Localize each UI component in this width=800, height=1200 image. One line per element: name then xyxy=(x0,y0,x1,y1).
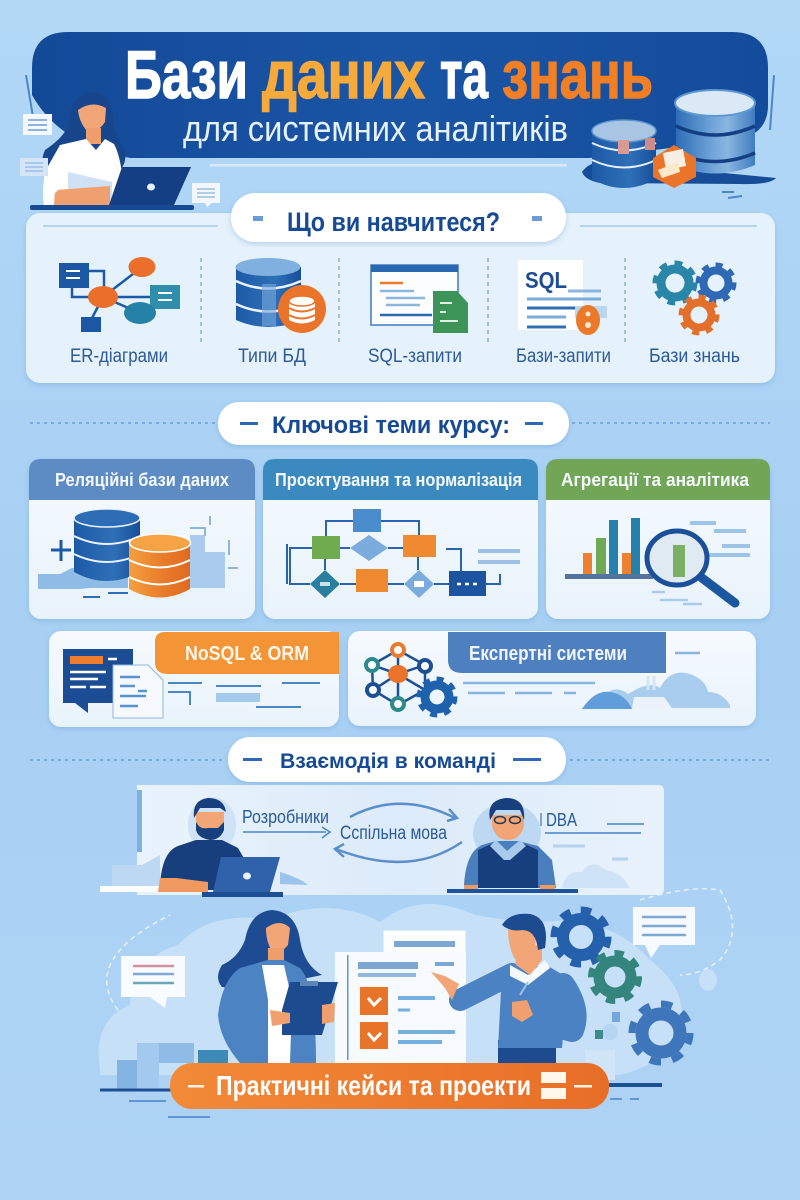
icon: SQL window xyxy=(371,265,468,333)
label: Бази знань xyxy=(649,346,740,367)
icon: SQL document: SQL xyxy=(525,267,567,293)
arrow xyxy=(243,827,330,838)
panel: team collaboration xyxy=(100,785,664,897)
decorative blocks xyxy=(100,1043,662,1117)
card: expert systems: Експертні системи xyxy=(469,643,627,665)
icon: ER diagram xyxy=(59,257,180,332)
illustration: woman with laptop xyxy=(20,92,220,210)
title xyxy=(125,37,653,113)
arrows: exchange cycle xyxy=(335,804,462,862)
header banner xyxy=(26,32,774,166)
pill heading: key topics xyxy=(218,402,569,445)
chat bubbles xyxy=(20,114,220,207)
illustration: documents with checklist xyxy=(335,930,466,1066)
title: знань xyxy=(502,37,653,113)
icon: stacked bars xyxy=(541,1072,566,1099)
subtitle: для системних аналітиків xyxy=(183,108,568,149)
card: aggregations and analytics: Агрегації та аналітика xyxy=(561,470,750,490)
icon: SQL document xyxy=(518,260,607,335)
pill heading: Що ви навчитеся? xyxy=(287,207,500,237)
flowchart xyxy=(287,509,520,598)
title: Бази xyxy=(125,37,248,113)
illustration: woman with clipboard xyxy=(218,910,338,1063)
icon: knowledge network and gear xyxy=(366,644,455,715)
label: Типи БД xyxy=(238,346,306,367)
card: design and normalization: Проєктування та нормалізація xyxy=(275,470,522,490)
illustration: DBA xyxy=(447,798,578,893)
card: design and normalization xyxy=(263,459,538,619)
backdrop: project scene cloud xyxy=(99,904,682,1075)
icon: DB types xyxy=(236,258,326,333)
icon: documents xyxy=(63,649,320,718)
chat bubble: left xyxy=(121,956,185,1008)
card: expert systems xyxy=(348,631,756,726)
card: relational databases xyxy=(29,459,255,619)
pill heading: team interaction: Взаємодія в команді xyxy=(280,750,496,773)
pill heading: team interaction xyxy=(228,737,566,782)
card: NoSQL and ORM: NoSQL & ORM xyxy=(185,643,309,665)
label: Бази-запити xyxy=(516,346,611,367)
label: DBA: DBA xyxy=(546,810,577,830)
bar chart with magnifier xyxy=(565,518,750,604)
illustration: small cloud xyxy=(562,864,630,888)
title: даних xyxy=(262,37,425,113)
card: aggregations and analytics xyxy=(546,459,770,619)
label: developers: Розробники xyxy=(242,807,329,827)
banner: practical cases and projects xyxy=(170,1063,609,1109)
pill heading: key topics: Ключові теми курсу: xyxy=(272,412,510,439)
chat bubble: right xyxy=(633,907,695,958)
illustration: database stack xyxy=(582,90,776,198)
card: NoSQL and ORM xyxy=(49,631,339,727)
pill heading xyxy=(231,193,566,242)
label: SQL-запити xyxy=(368,346,462,367)
panel: what you will learn xyxy=(26,193,775,383)
title: та xyxy=(440,37,489,113)
card: relational databases: Реляційні бази даних xyxy=(55,470,229,490)
label: common language: Сспільна мова xyxy=(340,823,447,844)
illustration: databases xyxy=(38,509,238,598)
label: ER-діаграми xyxy=(70,346,168,367)
banner: practical cases and projects: Практичні кейси та проекти xyxy=(216,1070,531,1101)
illustration: cloud xyxy=(582,673,730,709)
icon: gears xyxy=(554,910,690,1062)
icon: gears xyxy=(655,263,734,333)
illustration: man pointing xyxy=(431,914,575,1066)
illustration: developer xyxy=(100,797,308,897)
